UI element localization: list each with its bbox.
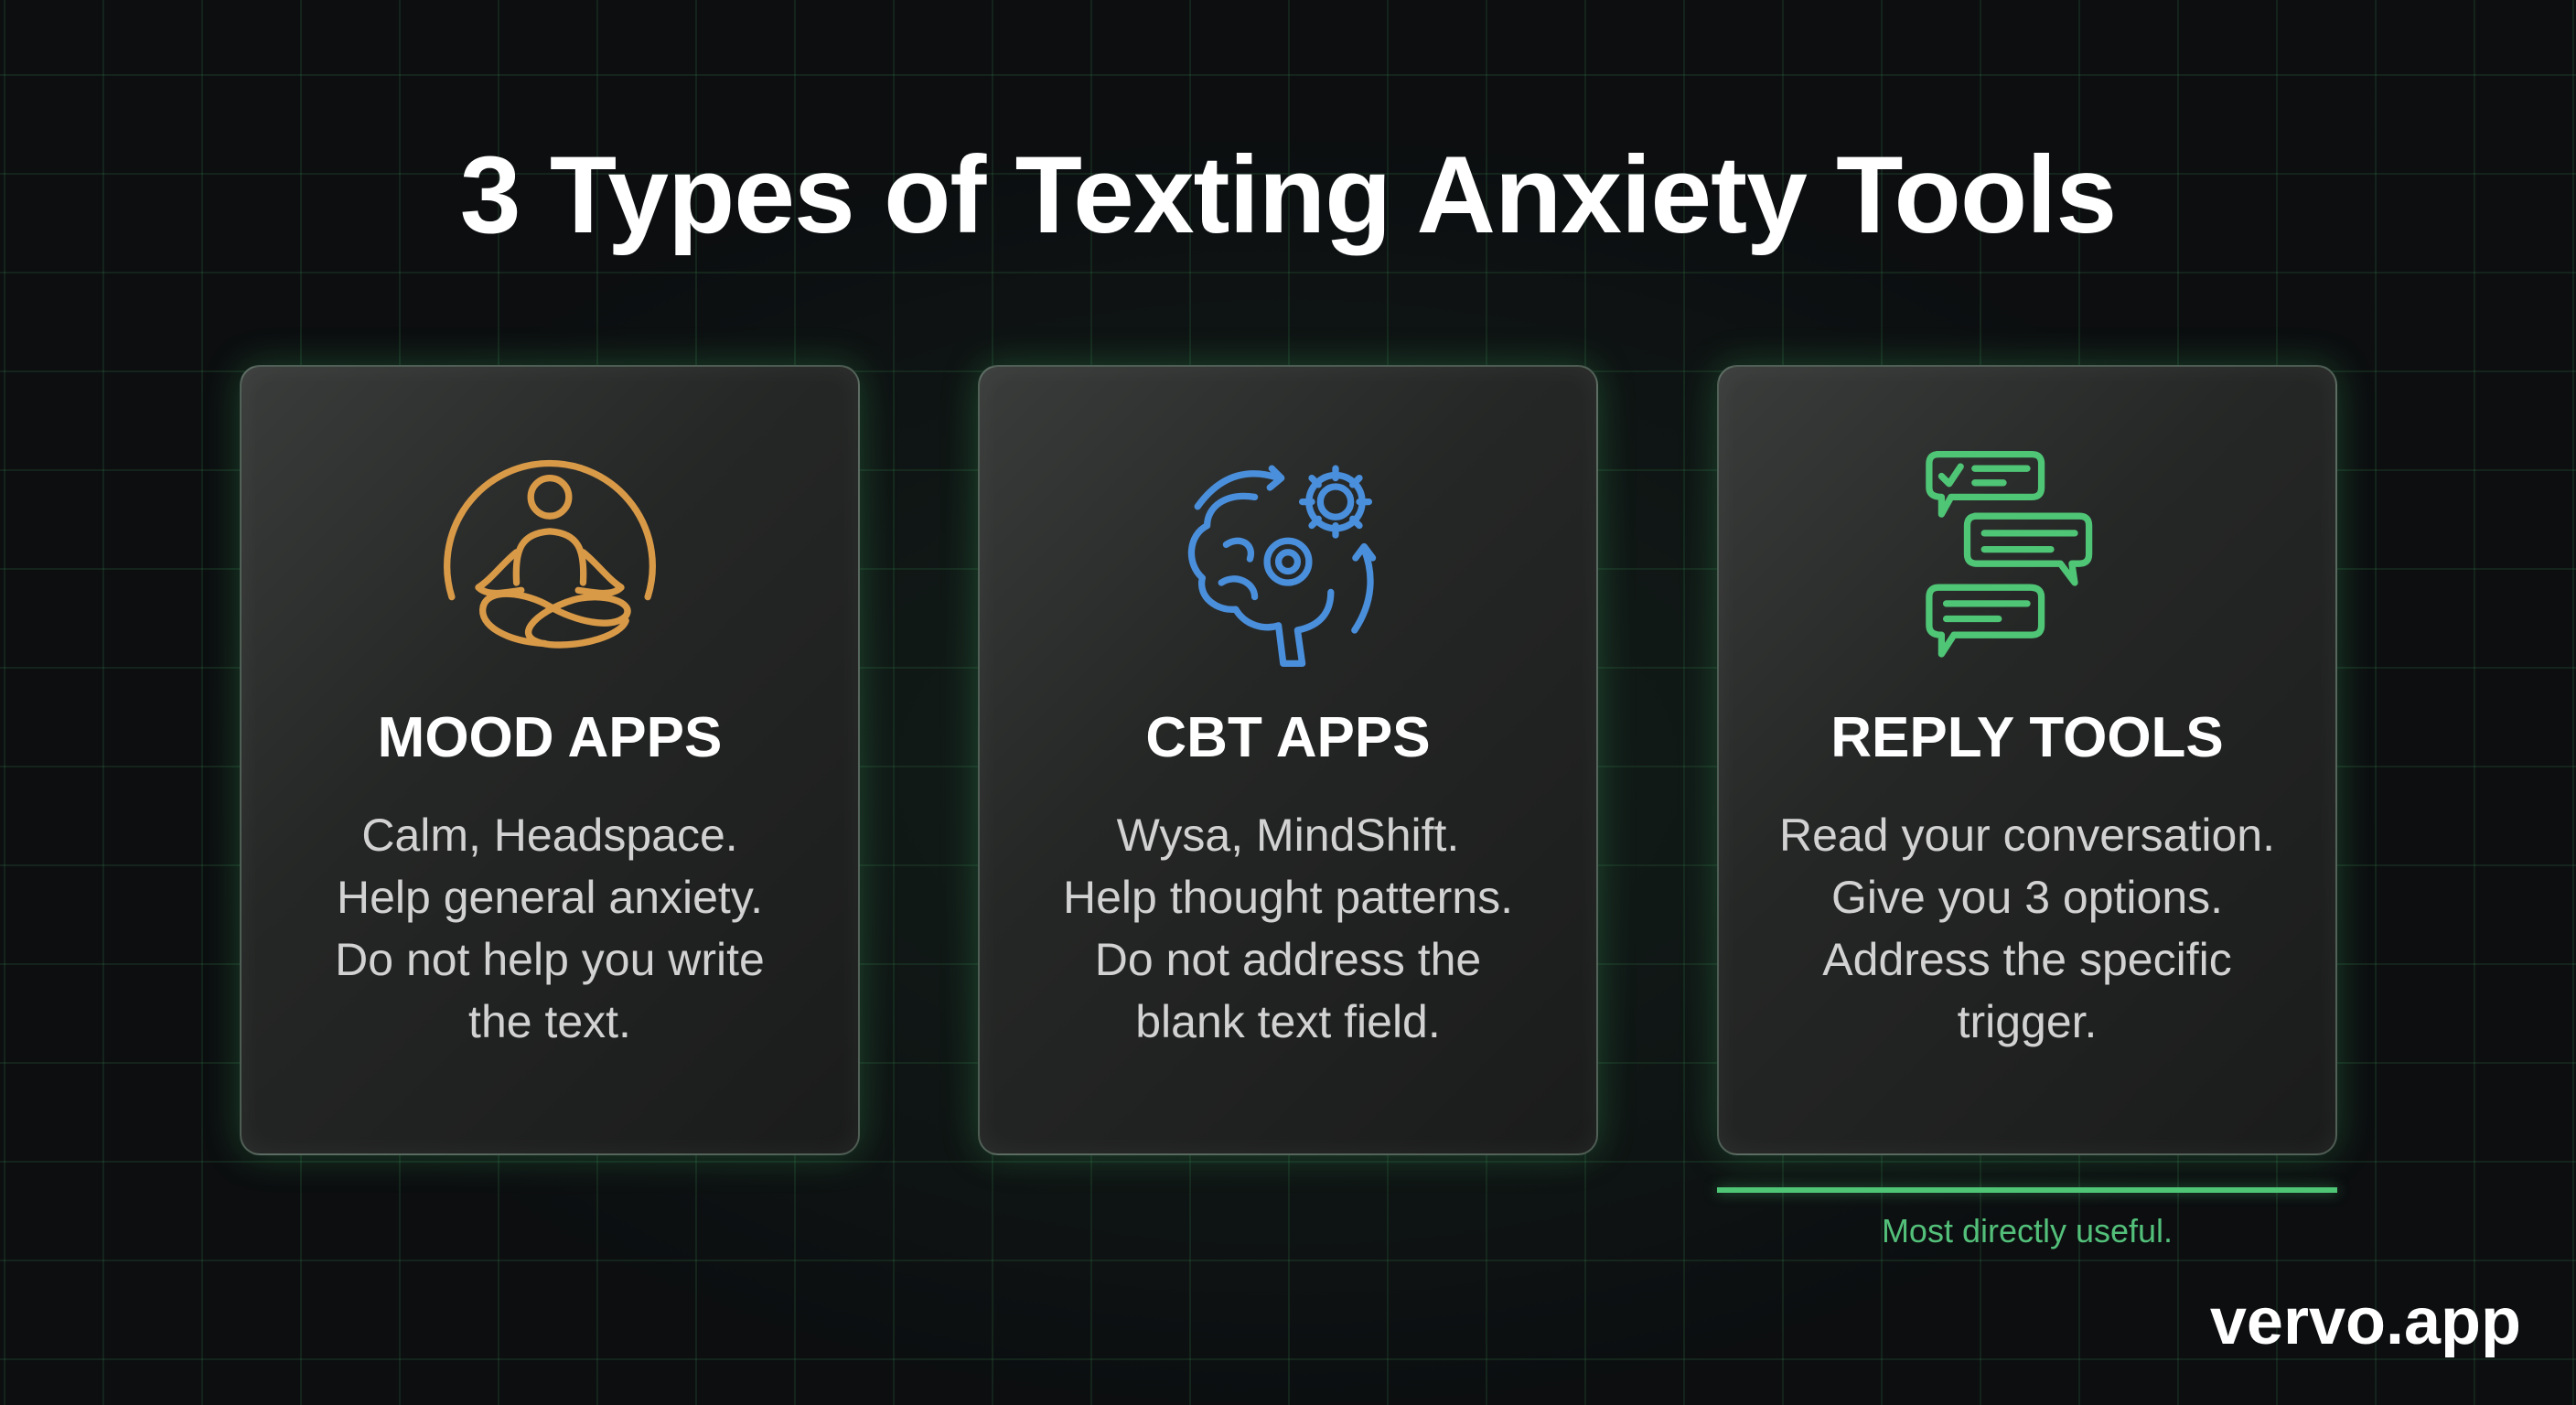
text block: Calm, Headspace. [361, 810, 738, 861]
text block: trigger. [1958, 996, 2097, 1047]
text block: Read your conversation. [1779, 810, 2275, 861]
text block: Address the specific [1822, 934, 2232, 985]
text block [335, 810, 765, 1047]
panel: cbt apps [978, 365, 1598, 1155]
text block: blank text field. [1135, 996, 1441, 1047]
text block [1779, 810, 2275, 1047]
heading: REPLY TOOLS [1830, 706, 2224, 769]
text block: Help thought patterns. [1063, 872, 1513, 923]
icon: chat bubbles [1926, 451, 2093, 658]
text block: the text. [468, 996, 631, 1047]
text block: Do not address the [1095, 934, 1481, 985]
text block: Help general anxiety. [337, 872, 763, 923]
brand: vervo.app [2210, 1285, 2521, 1358]
text block [1063, 810, 1513, 1047]
highlight line [1717, 1187, 2337, 1193]
panel: reply tools [1717, 365, 2337, 1155]
text block: Wysa, MindShift. [1117, 810, 1459, 861]
panel: mood apps [240, 365, 860, 1155]
text block: Give you 3 options. [1831, 872, 2223, 923]
heading: MOOD APPS [378, 706, 722, 769]
icon: meditation figure [444, 459, 656, 649]
heading: CBT APPS [1145, 706, 1431, 769]
text block: Do not help you write [335, 934, 765, 985]
callout: most directly useful: Most directly useful. [1882, 1212, 2173, 1249]
icon: brain with gears [1187, 465, 1376, 667]
title: 3 Types of Texting Anxiety Tools [460, 134, 2116, 256]
